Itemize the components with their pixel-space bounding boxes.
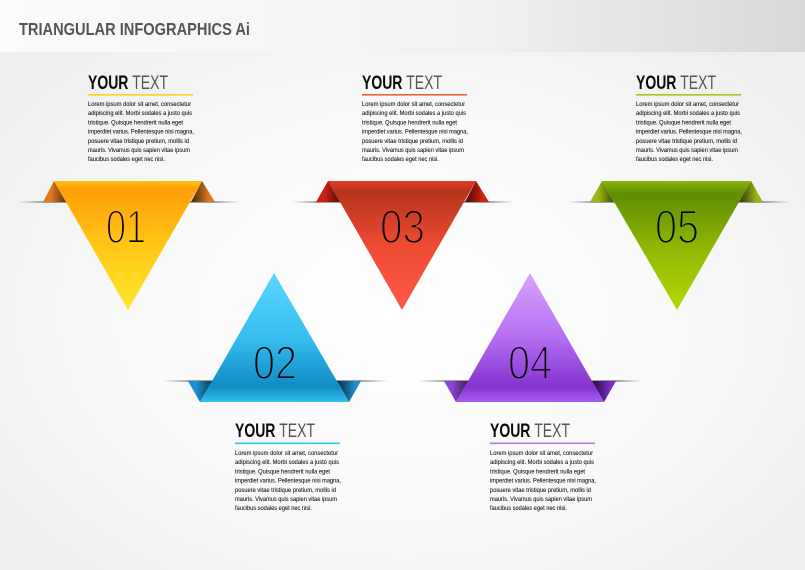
number 04: 04 — [508, 336, 552, 389]
text block 3: YOUR TEXT — [362, 73, 442, 94]
header bar — [0, 0, 805, 52]
title: TRIANGULAR INFOGRAPHICS Ai — [19, 19, 250, 39]
text block 2: YOUR TEXT — [235, 421, 315, 442]
triangle 01 — [18, 181, 240, 310]
text block 3 — [362, 73, 468, 163]
text block 5 — [636, 73, 742, 163]
number 02: 02 — [253, 336, 297, 389]
number 03: 03 — [380, 200, 425, 253]
triangle 05 — [568, 181, 790, 310]
triangle 03 — [292, 181, 514, 310]
text block 4 — [490, 421, 596, 512]
text block 2 — [235, 421, 341, 512]
text block 1 — [88, 73, 194, 163]
triangle 02 — [163, 273, 388, 402]
text block 4: YOUR TEXT — [490, 421, 570, 442]
number 01: 01 — [106, 200, 146, 253]
number 05: 05 — [655, 200, 699, 253]
text block 5: YOUR TEXT — [636, 73, 716, 94]
triangle 04 — [418, 273, 643, 402]
text block 1: YOUR TEXT — [88, 73, 168, 94]
